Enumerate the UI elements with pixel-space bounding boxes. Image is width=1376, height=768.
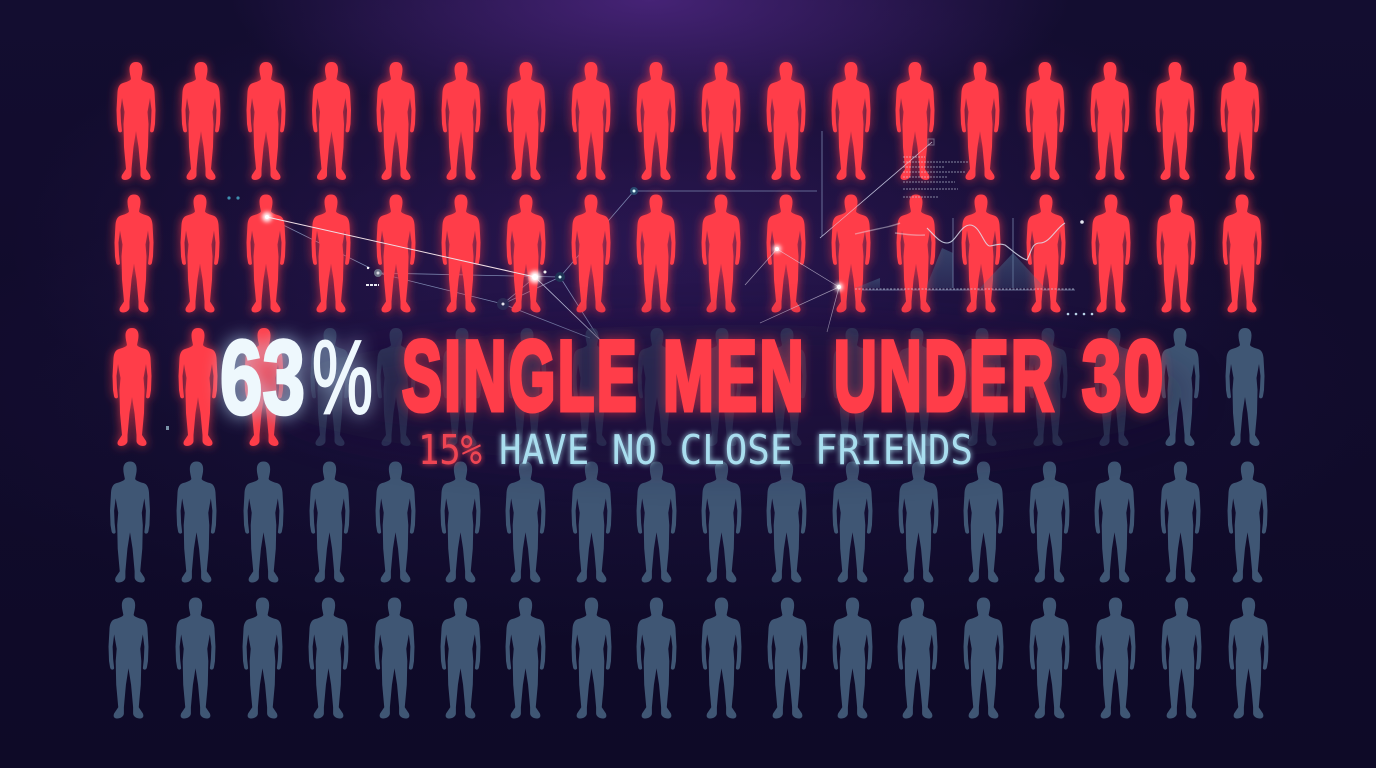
headline stat: 63%: 63	[220, 320, 305, 436]
network and chart behind figures	[267, 131, 1075, 340]
sub stat: 15%: 15%	[418, 426, 482, 474]
headline stat: 63%: %	[312, 320, 373, 436]
headline: single men under 30: MEN	[663, 320, 806, 431]
dark haze behind headline	[270, 325, 1190, 465]
headline: single men under 30: SINGLE	[402, 320, 639, 431]
headline: single men under 30	[402, 320, 1166, 431]
row 2: highlighted figures	[114, 194, 1262, 312]
sub headline: have no close friends: HAVE NO CLOSE FRIENDS	[499, 426, 973, 474]
headline: single men under 30: UNDER	[834, 320, 1056, 431]
row 3: highlighted figures	[112, 328, 284, 446]
row 4: muted figures	[110, 462, 1267, 582]
row 3: muted figures	[310, 328, 1264, 446]
headline: single men under 30: 30	[1082, 320, 1166, 431]
line chart overlay	[855, 223, 1075, 289]
row 5: muted figures	[109, 598, 1268, 718]
data text block	[903, 139, 968, 197]
network lines and nodes	[166, 142, 1093, 430]
row 1: highlighted figures	[116, 62, 1260, 180]
